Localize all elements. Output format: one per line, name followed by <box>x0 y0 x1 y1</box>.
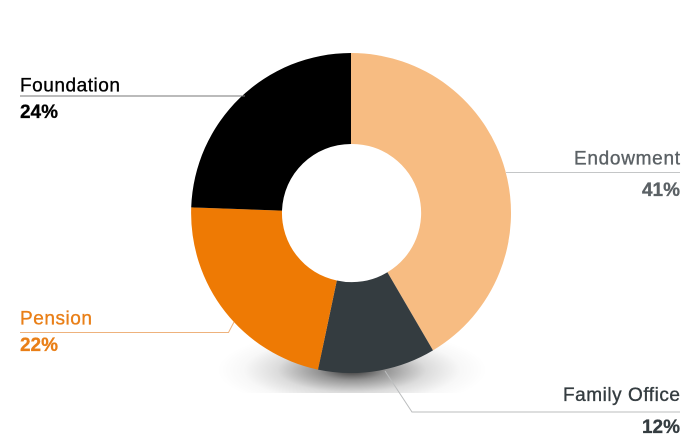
Family Office name: Family Office <box>563 385 680 406</box>
donut chart <box>191 53 511 373</box>
Endowment name: Endowment <box>574 148 681 170</box>
pie shadow <box>215 335 489 393</box>
slice: Endowment 41% <box>351 53 511 350</box>
Pension name: Pension <box>20 308 92 330</box>
Endowment value: 41% <box>642 180 680 201</box>
Foundation value: 24% <box>20 102 58 123</box>
leader line: Pension <box>20 322 234 332</box>
Family Office value: 12% <box>642 417 680 438</box>
Pension value: 22% <box>20 335 58 356</box>
slice: Foundation 24% <box>191 53 351 211</box>
slice: Family Office 12% <box>318 272 433 373</box>
slice: Pension 22% <box>191 207 337 370</box>
leader line: Family Office <box>385 371 680 412</box>
label: Endowment <box>506 148 681 201</box>
label: Pension <box>20 308 234 356</box>
Foundation name: Foundation <box>20 76 120 96</box>
label: Family Office <box>385 371 680 438</box>
label: Foundation <box>20 76 245 123</box>
leader line: Foundation <box>20 95 245 97</box>
leader line: Endowment <box>506 172 680 174</box>
